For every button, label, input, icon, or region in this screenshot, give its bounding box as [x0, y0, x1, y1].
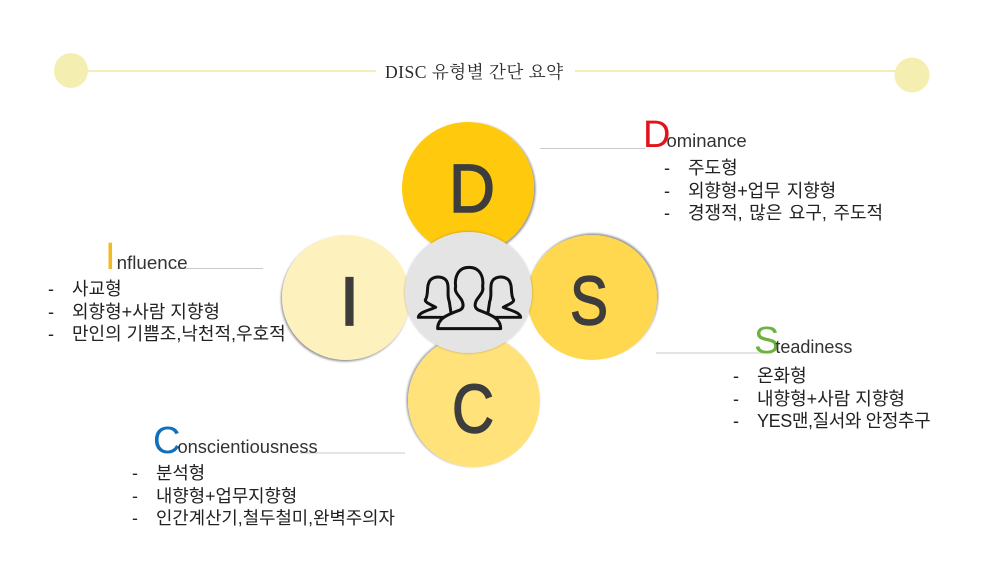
list: Conscientiousness traits: -: [132, 463, 138, 483]
circle D: D: [449, 150, 495, 227]
title: DISC 유형별 간단 요약: [385, 62, 564, 82]
heading: Dominance: Dominance: [643, 114, 747, 156]
circle C: [408, 335, 540, 467]
list: Dominance traits: [664, 158, 883, 223]
list: Influence traits: 사교형: [72, 279, 122, 299]
circle S: [527, 235, 657, 360]
panel: Steadiness: [733, 320, 930, 431]
list: Steadiness traits: [733, 366, 930, 431]
list: Steadiness traits: 내향형+사람 지향형: [757, 389, 905, 409]
list: Steadiness traits: -: [733, 411, 739, 431]
icon: three people: [418, 267, 521, 329]
list: Steadiness traits: YES맨,질서와 안정추구: [757, 411, 930, 431]
list: Conscientiousness traits: -: [132, 486, 138, 506]
list: Dominance traits: -: [664, 203, 670, 223]
list: Dominance traits: 주도형: [688, 158, 738, 178]
list: Dominance traits: 경쟁적, 많은 요구, 주도적: [688, 203, 883, 223]
heading: Influence: Influence: [105, 236, 188, 278]
list: Steadiness traits: 온화형: [757, 366, 807, 386]
list: Steadiness traits: -: [733, 366, 739, 386]
list: Conscientiousness traits: -: [132, 508, 138, 528]
heading: Conscientiousness: Conscientiousness: [153, 420, 318, 462]
list: Influence traits: 외향형+사람 지향형: [72, 302, 220, 322]
panel: Influence: [48, 236, 286, 344]
list: Influence traits: -: [48, 279, 54, 299]
list: Influence traits: [48, 279, 286, 344]
heading: Steadiness: Steadiness: [754, 320, 852, 362]
list: Conscientiousness traits: 분석형: [156, 463, 205, 483]
list: Conscientiousness traits: 내향형+업무지향형: [156, 486, 297, 506]
list: Influence traits: 만인의 기쁨조,낙천적,우호적: [72, 324, 286, 344]
circle S: S: [570, 262, 608, 340]
panel: Dominance: [643, 114, 883, 223]
list: Influence traits: -: [48, 302, 54, 322]
list: Dominance traits: -: [664, 158, 670, 178]
list: Dominance traits: -: [664, 181, 670, 201]
list: Conscientiousness traits: 인간계산기,철두철미,완벽주의자: [156, 508, 395, 528]
panel: Conscientiousness: [132, 420, 395, 528]
list: Dominance traits: 외향형+업무 지향형: [688, 181, 836, 201]
center circle with people icon: [405, 232, 532, 353]
list: Influence traits: -: [48, 324, 54, 344]
circle C: C: [452, 370, 494, 448]
list: Conscientiousness traits: [132, 463, 395, 528]
circle I: [282, 235, 410, 360]
list: Steadiness traits: -: [733, 389, 739, 409]
circle I: I: [340, 263, 359, 340]
circle D: [402, 122, 534, 254]
